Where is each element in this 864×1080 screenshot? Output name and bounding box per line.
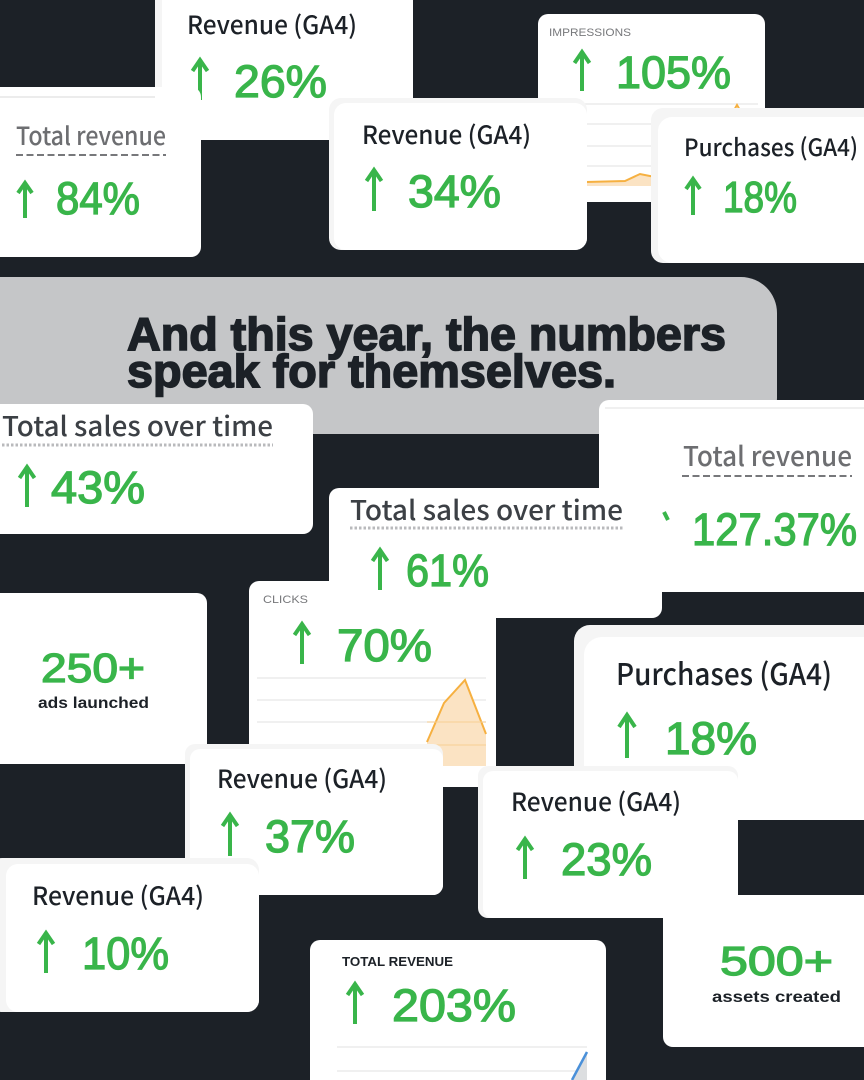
card: clicks 70% — [249, 581, 496, 787]
card: 250+ ads launched — [0, 593, 207, 764]
card: purchases 18%: Purchases (GA4) — [684, 128, 858, 163]
card: total revenue 127.37%: Total revenue — [683, 435, 852, 474]
card: total revenue 127.37% — [599, 400, 864, 592]
impressions sparkline — [546, 104, 758, 186]
card: total sales 43%: 43% — [51, 462, 145, 513]
card: total revenue 203% — [310, 940, 606, 1080]
headline panel — [0, 277, 777, 434]
revenue line chart — [337, 1047, 587, 1080]
card: 500+ assets created: 500+ — [720, 938, 833, 984]
card: revenue 37% — [185, 744, 443, 895]
card: revenue 23%: 23% — [561, 834, 652, 885]
card: impressions 105% — [538, 14, 765, 202]
title — [127, 308, 726, 397]
card: purchases 18% large: 18% — [665, 713, 757, 764]
card: revenue 23%: Revenue (GA4) — [511, 783, 681, 819]
card: purchases 18% large: Purchases (GA4) — [616, 650, 832, 694]
card: revenue 34% — [329, 98, 587, 250]
card: total revenue 84%: Total revenue — [16, 117, 166, 153]
card: purchases 18%: 18% — [723, 173, 797, 222]
card: revenue 23% — [478, 766, 738, 918]
card: revenue 34%: 34% — [408, 166, 501, 217]
card: impressions 105%: 105% — [616, 47, 731, 98]
card: clicks 70%: 70% — [337, 620, 432, 671]
card: revenue 26%: 26% — [234, 56, 327, 107]
card: 250+ ads launched: 250+ — [41, 645, 145, 691]
clicks area chart — [257, 678, 486, 766]
card: total revenue 203%: 203% — [392, 980, 516, 1031]
card: revenue 34%: Revenue (GA4) — [362, 116, 531, 152]
card: total sales 43% — [0, 404, 313, 534]
card: impressions 105%: IMPRESSIONS — [549, 27, 631, 39]
card: purchases 18% — [651, 108, 864, 263]
card: total revenue 84% — [0, 87, 201, 257]
card: revenue 10%: Revenue (GA4) — [32, 877, 204, 913]
card: total sales 43%: Total sales over time — [2, 405, 273, 444]
card: total sales 61% — [329, 488, 662, 618]
card: total sales 61%: 61% — [406, 545, 489, 596]
title: And this year, the numbers — [127, 308, 726, 360]
card: 500+ assets created: assets created — [712, 989, 841, 1006]
card: purchases 18% large — [574, 625, 864, 820]
card: revenue 26% — [155, 0, 413, 140]
card: total sales 61%: Total sales over time — [350, 489, 623, 528]
title: speak for themselves. — [127, 345, 616, 397]
card: total revenue 84%: 84% — [56, 173, 140, 224]
card: clicks 70%: CLICKS — [263, 594, 308, 606]
card: total revenue 203%: TOTAL REVENUE — [342, 954, 453, 969]
card: revenue 26%: Revenue (GA4) — [187, 6, 357, 42]
card: revenue 10% — [0, 858, 259, 1012]
card: revenue 37%: 37% — [265, 811, 355, 862]
card: revenue 37%: Revenue (GA4) — [217, 760, 387, 796]
card: 500+ assets created — [663, 895, 864, 1047]
card: 250+ ads launched: ads launched — [38, 695, 149, 712]
card: revenue 10%: 10% — [82, 928, 169, 979]
